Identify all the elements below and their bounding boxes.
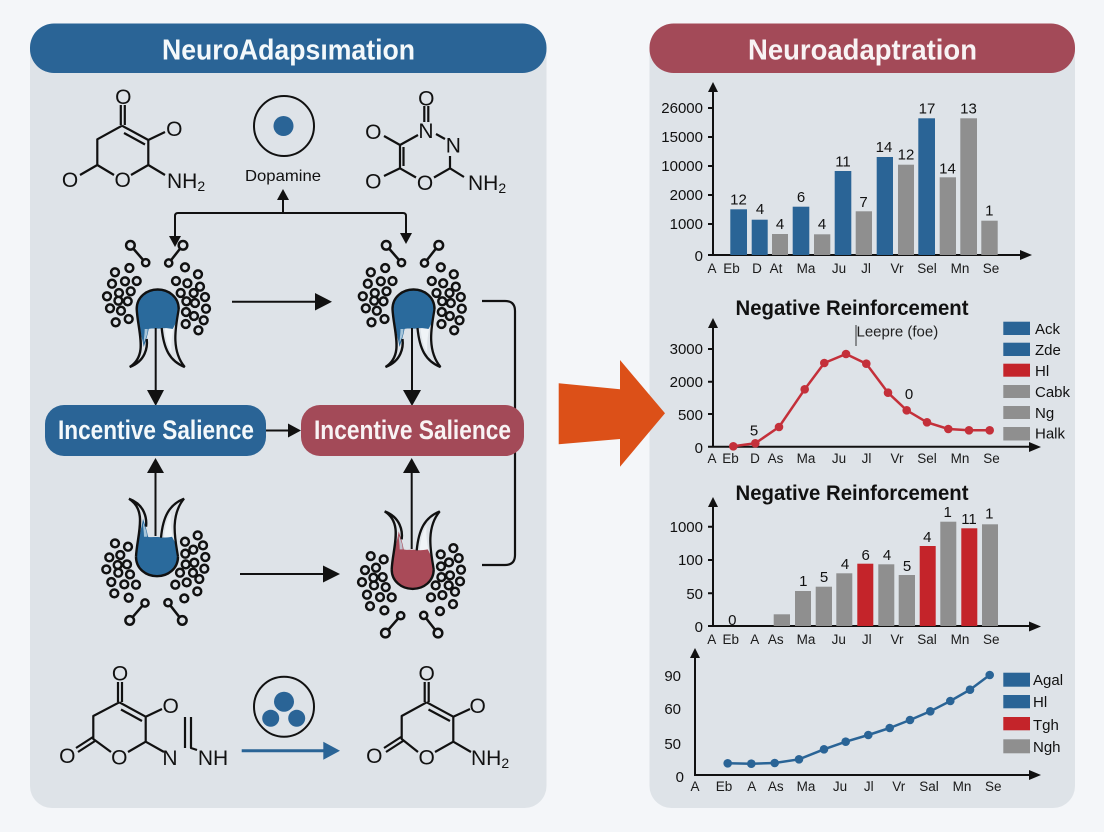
line chart: red: Mn	[951, 451, 969, 466]
bar chart: top: 4	[756, 201, 764, 218]
molecule: top right: 2	[498, 180, 506, 196]
bar chart: red and grey: A	[707, 632, 716, 647]
arrow: top left neuron down to salience	[147, 328, 164, 406]
legend: red line chart: Halk	[1035, 426, 1066, 442]
line chart: red: 2000	[670, 374, 703, 391]
bar chart: top: Eb	[723, 261, 740, 276]
icon: neuron lower left	[102, 499, 209, 625]
pill: Incentive Salience red	[301, 405, 524, 456]
molecule: bottom left: O	[111, 746, 127, 770]
molecule: top right: N	[418, 120, 434, 143]
bar chart: top: Vr	[890, 261, 904, 276]
legend: blue line chart: Tgh	[1033, 717, 1059, 734]
molecule: bottom left: NH	[198, 747, 228, 770]
molecule: top left: O	[62, 169, 78, 192]
arrow: lower left neuron up to salience	[147, 458, 164, 536]
molecule: bottom left: O	[59, 745, 75, 768]
bar chart: red and grey: 0	[728, 612, 736, 629]
arrow: lower neurons left to right	[240, 566, 340, 582]
molecule: top right: N	[446, 134, 461, 158]
line chart: red: Leepre (foe)	[856, 324, 938, 340]
molecule: top left: O	[115, 169, 131, 192]
bar chart: red and grey: 6	[862, 547, 870, 564]
line chart: red: D	[750, 451, 760, 466]
legend: red line chart: Cabk	[1035, 384, 1071, 401]
line chart: blue: 60	[664, 701, 681, 718]
legend: blue line chart: Agal	[1033, 672, 1063, 689]
bar chart: top: 11	[835, 154, 851, 170]
bar chart: red and grey: 4	[923, 529, 931, 546]
line chart: red: Ju	[832, 451, 846, 466]
bar chart: red and grey: Jl	[862, 632, 872, 647]
heading: Negative Reinforcement upper: Negative Reinforcement	[736, 297, 969, 320]
line chart: blue: Vr	[892, 779, 906, 794]
line chart: blue: 0	[676, 769, 684, 786]
bar chart: top: 15000	[661, 129, 703, 146]
molecule: top right: O	[418, 88, 434, 110]
line chart: blue: A	[747, 779, 756, 794]
icon: dopamine circle	[254, 96, 314, 156]
bar chart: top: A	[707, 261, 717, 276]
bar chart: top: Mn	[951, 261, 969, 276]
molecule: top left: O	[166, 118, 182, 141]
bar chart: top: 0	[695, 248, 703, 265]
legend: red line chart: Ng	[1035, 405, 1054, 422]
bar chart: red and grey: As	[768, 632, 784, 647]
molecule: top left: NH	[167, 170, 197, 193]
bar chart: red and grey: Eb	[722, 632, 739, 647]
bar chart: top: D	[752, 261, 762, 276]
bar chart: top: At	[770, 261, 783, 276]
arrow: top right neuron down to salience	[403, 328, 421, 406]
bar chart: red and grey: 1	[985, 506, 993, 522]
bar chart: top: 14	[939, 160, 956, 178]
molecule: top right: O	[365, 121, 381, 144]
molecule: bottom left: O	[112, 662, 128, 686]
icon: neuron top right	[359, 241, 466, 367]
connector: right feedback bracket	[482, 301, 515, 565]
heading: Neuroadaptration	[650, 24, 1075, 73]
heading: Negative Reinforcement lower: Negative Reinforcement	[736, 482, 969, 505]
molecule: bottom left: N	[162, 747, 178, 770]
bar chart: top: 12	[898, 146, 914, 164]
legend: red line chart	[1003, 321, 1071, 442]
icon: three-molecule circle	[254, 677, 314, 737]
line chart: red: 500	[678, 407, 703, 424]
line chart: blue: Jl	[864, 779, 874, 794]
legend: red line chart: Hl	[1035, 363, 1049, 380]
line chart: blue: Mn	[953, 779, 971, 794]
icon: neuron top left	[103, 241, 210, 367]
heading: Neuroadaptration: Neuroadaptration	[748, 34, 977, 66]
bar chart: top: 4	[818, 216, 826, 233]
molecule: top left: 2	[197, 178, 205, 194]
bar chart: top: 26000	[661, 100, 703, 117]
icon: neuron lower right	[358, 511, 465, 637]
pill: Incentive Salience blue: Incentive Salience	[58, 415, 254, 445]
line chart: blue: Eb	[716, 779, 732, 794]
bar chart: red and grey: 1000	[670, 519, 703, 536]
molecule: top left: O	[115, 86, 131, 109]
line chart: red: Vr	[890, 451, 904, 466]
bar chart: red and grey: 5	[820, 569, 828, 586]
bar chart: red and grey: Ma	[797, 632, 816, 647]
bar chart: red and grey: 11	[961, 511, 977, 528]
line chart: blue: Ju	[833, 779, 847, 794]
heading: NeuroAdapsımation	[30, 24, 546, 73]
line chart: blue: As	[768, 779, 784, 794]
line chart: blue: 90	[664, 668, 681, 685]
arrow: dopamine branching to both neurons	[169, 189, 412, 247]
line chart: blue	[664, 648, 1041, 794]
bar chart: red and grey: Ju	[832, 632, 846, 647]
line chart: red: Jl	[862, 451, 871, 466]
molecule: bottom right: 2	[501, 755, 509, 771]
line chart: red: Ma	[797, 451, 816, 466]
bar chart: top: 10000	[661, 158, 703, 175]
arrow: blue reaction	[242, 742, 340, 760]
legend: blue line chart: Hl	[1033, 694, 1047, 711]
molecule: bottom right: O	[470, 695, 486, 718]
heading: NeuroAdapsımation: NeuroAdapsımation	[162, 34, 415, 66]
line chart: red: 0	[905, 386, 913, 403]
line chart: red: 5	[750, 422, 758, 440]
pill: Incentive Salience blue	[45, 405, 266, 456]
legend: red line chart: Ack	[1035, 321, 1061, 338]
arrow: large orange transition	[559, 360, 665, 467]
legend: red line chart: Zde	[1035, 342, 1061, 359]
molecule: bottom right: O	[419, 662, 435, 686]
molecule: top left	[62, 86, 205, 194]
bar chart: red and grey: Mn	[951, 632, 969, 647]
bar chart: red and grey: A	[750, 632, 759, 647]
bar chart: red and grey: 0	[695, 619, 703, 636]
bar chart: red and grey: Se	[983, 632, 1000, 647]
line chart: red: Eb	[722, 451, 739, 466]
line chart: red: As	[768, 451, 784, 466]
bar chart: top: Se	[983, 261, 999, 276]
label: Dopamine: Dopamine	[245, 168, 321, 185]
bar chart: top: Sel	[917, 261, 937, 276]
legend: blue line chart	[1003, 672, 1063, 756]
line chart: red	[670, 318, 1041, 466]
molecule: top right	[365, 88, 506, 196]
line chart: blue: Sal	[919, 779, 939, 794]
line chart: red: 3000	[670, 341, 703, 358]
bar chart: red and grey: 1	[944, 504, 952, 521]
bar chart: top: 12	[730, 192, 747, 208]
molecule: top right: O	[365, 170, 381, 194]
bar chart: top: 4	[776, 216, 784, 233]
bar chart: top: Ma	[797, 261, 816, 276]
bar chart: red and grey: 4	[841, 556, 849, 573]
molecule: bottom right	[366, 662, 509, 771]
panel: right charts	[650, 24, 1075, 808]
bar chart: top: 17	[919, 100, 935, 118]
arrow: lower right neuron up to salience	[403, 458, 420, 549]
line chart: blue: Ma	[797, 779, 816, 794]
bar chart: top: 13	[960, 100, 977, 118]
legend: blue line chart: Ngh	[1033, 739, 1061, 756]
molecule: top right: O	[417, 172, 433, 195]
molecule: bottom right: NH	[471, 747, 501, 770]
molecule: bottom right: O	[366, 745, 382, 768]
line chart: red: Se	[983, 451, 1000, 466]
bar chart: top: 1	[985, 202, 993, 220]
bar chart: top	[661, 82, 1032, 276]
bar chart: red and grey: 100	[678, 552, 703, 569]
line chart: red: 0	[695, 440, 703, 457]
bar chart: top: Jl	[861, 261, 871, 276]
bar chart: top: 14	[876, 139, 892, 156]
arrow: between salience pills	[266, 424, 301, 438]
arrow: top neurons left to right	[232, 293, 332, 310]
line chart: blue: 50	[664, 736, 681, 753]
line chart: blue: A	[690, 779, 700, 794]
molecule: top right: NH	[468, 172, 498, 195]
panel: left neural pathway	[30, 24, 546, 808]
bar chart: top: 2000	[670, 187, 703, 204]
pill: Incentive Salience red: Incentive Salience	[314, 415, 511, 445]
bar chart: red and grey: 1	[799, 573, 807, 590]
bar chart: red and grey: 4	[883, 547, 891, 564]
bar chart: red and grey	[670, 497, 1041, 647]
bar chart: red and grey: 5	[903, 558, 911, 575]
line chart: red: Sel	[917, 451, 937, 466]
molecule: bottom left: O	[163, 695, 179, 718]
bar chart: top: 6	[797, 189, 805, 206]
molecule: bottom right: O	[419, 746, 435, 770]
line chart: red: A	[707, 451, 717, 466]
bar chart: red and grey: Sal	[917, 632, 937, 647]
bar chart: top: 7	[859, 194, 868, 211]
bar chart: red and grey: 50	[686, 586, 703, 603]
bar chart: red and grey: Vr	[890, 632, 904, 647]
molecule: bottom left	[59, 662, 228, 770]
line chart: blue: Se	[985, 779, 1002, 794]
bar chart: top: 1000	[670, 216, 703, 233]
bar chart: top: Ju	[832, 261, 846, 276]
